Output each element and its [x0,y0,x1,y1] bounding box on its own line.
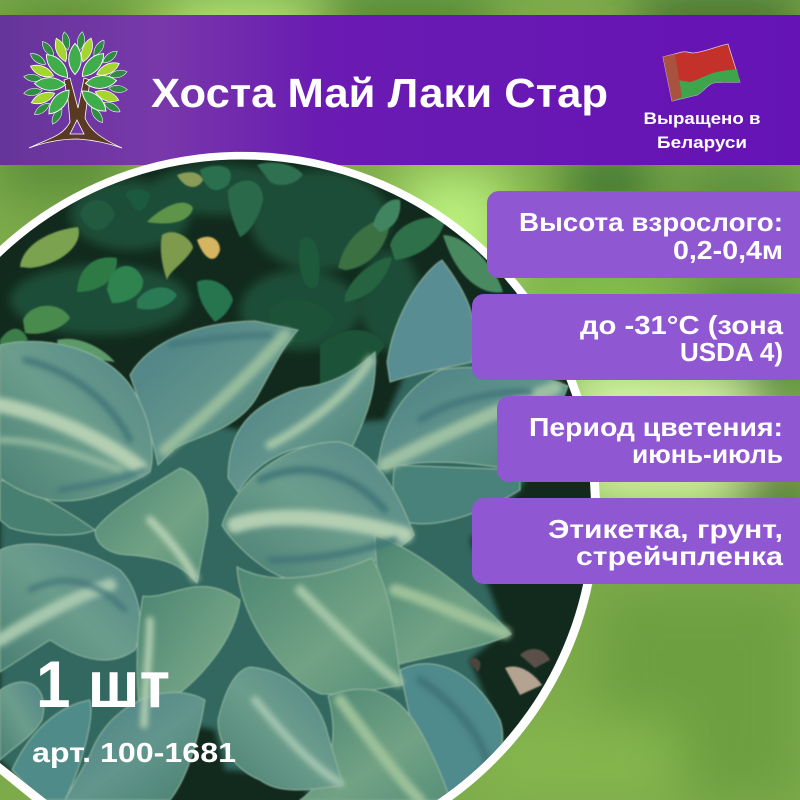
tree trunk and roots [29,78,122,148]
title: Хоста Май Лаки Стар [151,70,608,116]
icon: Belarus flag [663,44,740,101]
upper foliage leaves [0,163,503,385]
soil stones [468,649,550,695]
header band [0,15,800,165]
panel: flowering period: Период цветения: [529,412,783,442]
label: grown in Belarus [644,109,760,152]
panel: height [487,191,800,278]
panel: frost hardiness: до -31°С (зона [580,310,784,340]
panel: package contents [472,498,800,584]
panel: frost hardiness [472,294,800,380]
panel: package contents: Этикетка, грунт, [548,514,783,544]
panel: flowering period: июнь-июль [632,439,783,469]
panel: frost hardiness: USDA 4) [680,337,783,367]
article number: арт. 100-1681 [32,737,236,768]
white ring [0,152,600,800]
label: grown in Belarus: Выращено в [644,109,760,128]
panel: height: Высота взрослого: [519,207,783,237]
logo: tree [23,31,128,148]
hosta underlay [0,361,527,800]
circular plant photo [0,152,600,800]
panel: flowering period [497,396,800,482]
mottled dark foliage [10,165,420,350]
logo leaves [23,31,128,126]
hosta leaves [0,260,568,800]
leaf variegation [0,335,555,800]
panel: height: 0,2-0,4м [673,235,783,265]
panel: package contents: стрейчпленка [576,541,784,571]
quantity: 1 шт [36,647,170,721]
label: grown in Belarus: Беларуси [657,133,747,152]
